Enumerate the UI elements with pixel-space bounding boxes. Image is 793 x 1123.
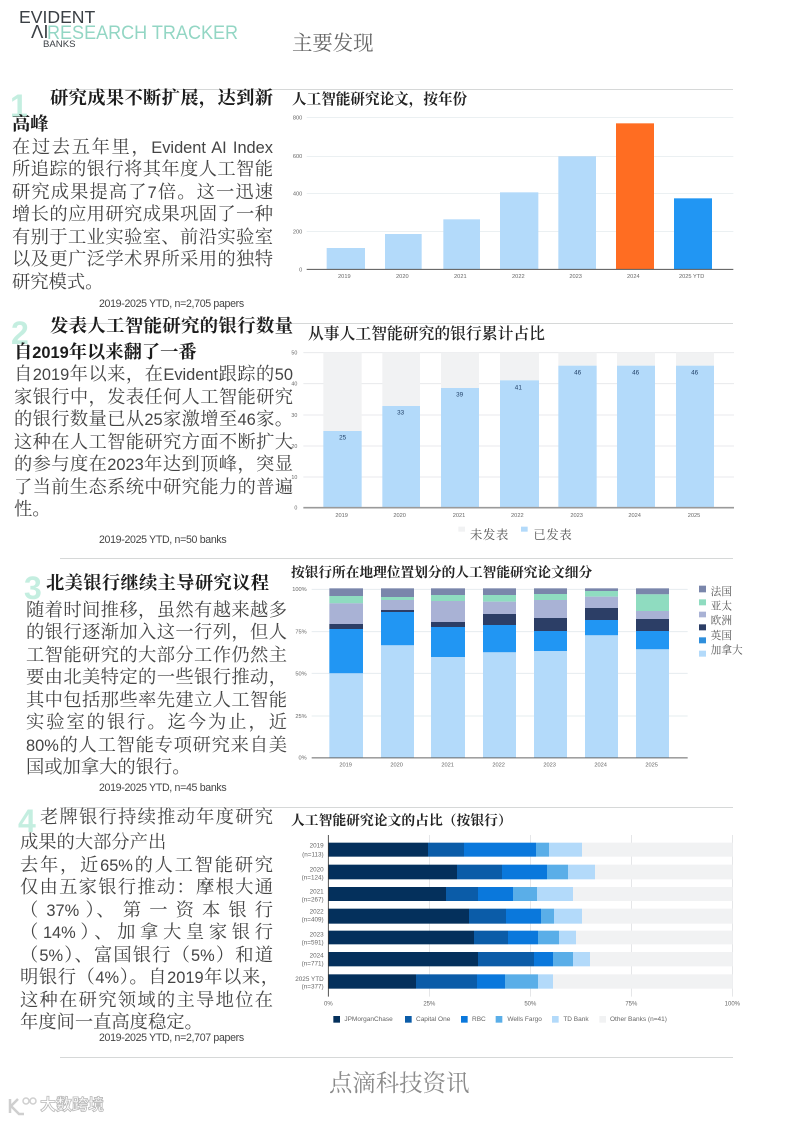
- stacked bar chart: cumulative share of banks: 0: [294, 506, 297, 512]
- stacked bar chart: papers by bank geography: 2021: [441, 763, 454, 769]
- legend: Europe: [699, 612, 732, 627]
- stacked bar chart: cumulative share of banks: 46: [691, 369, 699, 376]
- body text 2: 这种在人工智能研究方面不断扩大: [14, 432, 293, 452]
- bar chart: AI research papers by year: 2020: [396, 274, 409, 280]
- stacked bar chart: cumulative share of banks: 50: [291, 351, 297, 357]
- body text 3: 工智能研究的大部分工作仍然主: [26, 644, 287, 664]
- bar: 2024: [585, 588, 618, 758]
- heading 2: 自2019年以来翻了一番: [14, 342, 197, 362]
- stacked horizontal bar chart: share of papers by bank: (n=377): [302, 984, 324, 991]
- stacked bar chart: papers by bank geography: [292, 585, 743, 769]
- stacked horizontal bar chart: share of papers by bank: 2019: [310, 843, 324, 850]
- bar chart: AI research papers by year: [293, 116, 734, 280]
- legend: Wells Fargo: Wells Fargo: [507, 1016, 542, 1023]
- body text 2: 了当前生态系统中研究能力的普遍: [14, 476, 293, 496]
- stacked horizontal bar chart: share of papers by bank: 2023: [310, 932, 324, 939]
- body text 4: （ 37% ）、 第 一 资 本 银 行: [20, 900, 273, 920]
- body text 4: 年度间一直高度稳定。: [20, 1012, 203, 1032]
- body text 2: 自2019年以来，在Evident跟踪的50: [14, 364, 293, 384]
- logo wordmark: banks: BANKS: [43, 39, 76, 50]
- heading 3: 北美银行继续主导研究议程: [46, 573, 269, 593]
- legend: published: 已发表: [533, 527, 572, 542]
- stacked horizontal bar chart: share of papers by bank: 100%: [725, 1002, 740, 1008]
- bar: 2023: [534, 588, 567, 758]
- body text 2: 家银行中，发表任何人工智能研究: [14, 386, 293, 406]
- legend: JPMorgan Chase: JPMorganChase: [344, 1016, 393, 1023]
- stacked horizontal bar chart: share of papers by bank: (n=124): [302, 875, 324, 882]
- body text 3: 其中包括那些率先建立人工智能: [26, 690, 287, 710]
- body text 1: 有别于工业实验室、前沿实验室: [12, 226, 273, 246]
- chart title 4: 人工智能研究论文的占比（按银行）: [291, 813, 512, 828]
- heading 1: 研究成果不断扩展，达到新: [50, 88, 273, 108]
- stacked horizontal bar chart: share of papers by bank: 2022: [310, 909, 324, 916]
- stacked bar chart: cumulative share of banks: 20: [291, 444, 297, 450]
- legend: France: [699, 585, 732, 598]
- body text 2: [14, 364, 293, 519]
- legend: published: [521, 527, 572, 542]
- legend: RBC: [461, 1016, 486, 1023]
- stacked bar chart: cumulative share of banks: 2020: [393, 513, 406, 519]
- body text 1: [12, 136, 273, 292]
- stacked bar chart: cumulative share of banks: 10: [291, 475, 297, 481]
- heading 4: [20, 806, 273, 852]
- logo mark: AI: ΛI: [31, 21, 48, 42]
- stacked bar chart: cumulative share of banks: 40: [291, 382, 297, 388]
- row: 2022: [328, 909, 732, 924]
- stacked bar chart: cumulative share of banks: [291, 350, 734, 542]
- bar chart: AI research papers by year: 200: [293, 230, 302, 236]
- row: 2024: [328, 952, 732, 966]
- panel 1 text: research output: [12, 88, 273, 292]
- panel 2 text: banks publishing: [14, 316, 293, 519]
- legend: Canada: 加拿大: [711, 643, 743, 656]
- footer brand: 点滴科技资讯: [329, 1071, 469, 1097]
- heading 4: 成果的大部分产出: [20, 832, 166, 852]
- legend: Europe: 欧洲: [711, 614, 732, 627]
- stacked bar chart: cumulative share of banks: 2022: [511, 513, 524, 519]
- section 2 number: 2: [11, 315, 29, 351]
- page title: 主要发现: [292, 33, 374, 55]
- heading 1: [12, 88, 273, 134]
- stacked horizontal bar chart: share of papers by bank: 25%: [423, 1002, 436, 1008]
- highlighted bar: 2024: [616, 123, 654, 269]
- body text 1: 所追踪的银行将其年度人工智能: [12, 159, 273, 179]
- stacked horizontal bar chart: share of papers by bank: 2025 YTD: [295, 976, 324, 983]
- stacked bar chart: cumulative share of banks: 2021: [453, 513, 465, 519]
- heading 4: 老牌银行持续推动年度研究: [40, 806, 273, 826]
- legend: APAC: [699, 599, 732, 613]
- body text 4: （14%）、加拿大皇家银行: [20, 922, 273, 942]
- stacked horizontal bar chart: share of papers by bank: 50%: [524, 1002, 537, 1008]
- row: 2023: [328, 931, 732, 944]
- stacked bar chart: papers by bank geography: 0%: [298, 756, 307, 762]
- stacked horizontal bar chart: share of papers by bank: 0%: [324, 1002, 333, 1008]
- body text 1: 在过去五年里，Evident AI Index: [12, 136, 273, 156]
- panel 4 text: incumbent banks: [20, 806, 279, 1032]
- stacked horizontal bar chart: share of papers by bank: (n=591): [302, 940, 324, 947]
- legend: France: 法国: [711, 585, 732, 598]
- body text 3: 实验室的银行。迄今为止，近: [26, 712, 287, 732]
- heading 1: 高峰: [12, 114, 49, 134]
- chart title 2: 从事人工智能研究的银行累计占比: [308, 326, 545, 343]
- body text 1: 研究成果提高了7倍。这一迅速: [12, 182, 273, 202]
- logo wordmark: research tracker: RESEARCH TRACKER: [47, 22, 238, 44]
- body text 2: 的银行数量已从25家激增至46家。: [14, 409, 293, 429]
- stacked bar chart: cumulative share of banks: 46: [632, 369, 640, 376]
- stacked bar chart: papers by bank geography: 25%: [295, 714, 307, 720]
- stacked bar chart: cumulative share of banks: 2019: [335, 513, 348, 519]
- bar chart: AI research papers by year: 0: [299, 268, 302, 274]
- stacked bar chart: cumulative share of banks: 2024: [628, 513, 641, 519]
- stacked bar chart: papers by bank geography: 100%: [292, 587, 307, 593]
- legend: RBC: RBC: [472, 1016, 486, 1023]
- body text 4: 明银行（4%）。自2019年以来，: [20, 967, 279, 987]
- row: 2021: [328, 887, 732, 901]
- bar chart: AI research papers by year: 2019: [338, 274, 351, 280]
- source note 2: 2019-2025 YTD, n=50 banks: [99, 534, 226, 546]
- stacked bar chart: cumulative share of banks: 46: [574, 369, 582, 376]
- chart title 1: 人工智能研究论文，按年份: [292, 92, 467, 108]
- body text 3: 随着时间推移，虽然有越来越多: [26, 600, 287, 620]
- body text 3: 国或加拿大的银行。: [26, 757, 191, 777]
- legend: USA: [699, 637, 706, 643]
- bar: 2021: [431, 588, 465, 758]
- stacked horizontal bar chart: share of papers by bank: [295, 835, 740, 1023]
- legend: Capital One: Capital One: [416, 1016, 451, 1023]
- bar chart: AI research papers by year: 2024: [627, 274, 640, 280]
- icon: watermark logo: [8, 1097, 37, 1116]
- stacked bar chart: cumulative share of banks: 41: [515, 385, 522, 392]
- stacked bar chart: papers by bank geography: 2019: [339, 763, 352, 769]
- legend: not published: 未发表: [470, 527, 508, 542]
- stacked bar chart: papers by bank geography: 2023: [543, 763, 556, 769]
- body text 1: 增长的应用研究成果巩固了一种: [12, 204, 273, 224]
- body text 4: 去年，近65%的人工智能研究: [20, 854, 273, 874]
- bar: 2019: [329, 588, 363, 758]
- legend: APAC: 亚太: [711, 600, 732, 613]
- bar chart: AI research papers by year: 400: [293, 192, 302, 198]
- bar chart: AI research papers by year: 2021: [454, 274, 467, 280]
- source note 4: 2019-2025 YTD, n=2,707 papers: [99, 1032, 244, 1044]
- bar chart: AI research papers by year: 2025 YTD: [679, 274, 704, 280]
- stacked bar chart: cumulative share of banks: 2025: [688, 513, 700, 519]
- stacked bar chart: cumulative share of banks: 33: [397, 409, 405, 416]
- body text 4: 仅由五家银行推动：摩根大通: [20, 877, 273, 897]
- panel 3 text: north american banks: [26, 573, 287, 777]
- watermark text: 大数跨境: [40, 1097, 104, 1114]
- stacked bar chart: papers by bank geography: 2020: [390, 763, 403, 769]
- legend: TD Bank: [552, 1016, 589, 1023]
- stacked bar chart: papers by bank geography: 2024: [594, 763, 607, 769]
- bar: 2025: [636, 588, 669, 758]
- bar chart: AI research papers by year: 800: [293, 116, 302, 122]
- body text 4: 这种在研究领域的主导地位在: [20, 990, 273, 1010]
- stacked horizontal bar chart: share of papers by bank: 2024: [310, 953, 324, 960]
- stacked bar chart: papers by bank geography: 75%: [295, 630, 307, 636]
- row: 2020: [328, 865, 732, 879]
- stacked horizontal bar chart: share of papers by bank: (n=113): [302, 852, 324, 859]
- section 4 number: 4: [18, 803, 36, 839]
- stacked horizontal bar chart: share of papers by bank: 75%: [625, 1002, 638, 1008]
- legend: Canada: [699, 643, 743, 657]
- body text 2: 性。: [14, 499, 51, 519]
- stacked horizontal bar chart: share of papers by bank: (n=409): [302, 917, 324, 924]
- body text 1: 研究模式。: [12, 272, 103, 292]
- stacked bar chart: papers by bank geography: 50%: [295, 672, 307, 678]
- body text 3: 要由北美特定的一些银行推动，: [26, 667, 287, 687]
- chart title 3: 按银行所在地理位置划分的人工智能研究论文细分: [291, 565, 592, 580]
- logo wordmark: EVIDENT: EVIDENT: [19, 7, 95, 27]
- bar: 2022: [483, 588, 516, 758]
- stacked horizontal bar chart: share of papers by bank: 2020: [310, 867, 324, 874]
- body text 4: （5%）、富国银行（5%）和道: [20, 944, 273, 964]
- heading 2: 发表人工智能研究的银行数量: [50, 316, 293, 336]
- stacked horizontal bar chart: share of papers by bank: (n=267): [302, 897, 324, 904]
- bar chart: AI research papers by year: 2023: [569, 274, 582, 280]
- stacked bar chart: cumulative share of banks: 30: [291, 413, 297, 419]
- body text 2: 的参与度在2023年达到顶峰，突显: [14, 454, 293, 474]
- body text 3: 80%的人工智能专项研究来自美: [26, 734, 287, 754]
- stacked horizontal bar chart: share of papers by bank: 2021: [310, 889, 324, 896]
- legend: TD Bank: TD Bank: [563, 1016, 589, 1023]
- legend: other banks: Other Banks (n=41): [610, 1016, 667, 1023]
- body text 3: [26, 600, 287, 777]
- logo: Evident AI Research Tracker Banks: [19, 7, 238, 50]
- legend: UK: [699, 624, 732, 642]
- source note 3: 2019-2025 YTD, n=45 banks: [99, 782, 226, 794]
- bar: 2020: [381, 588, 414, 758]
- watermark: [8, 1096, 104, 1116]
- legend: UK: 英国: [711, 629, 732, 642]
- heading 2: [14, 316, 293, 362]
- source note 1: 2019-2025 YTD, n=2,705 papers: [99, 298, 244, 310]
- stacked bar chart: papers by bank geography: 2025: [645, 763, 658, 769]
- stacked bar chart: papers by bank geography: 2022: [492, 763, 505, 769]
- bar: 2025 YTD: [674, 198, 712, 269]
- stacked horizontal bar chart: share of papers by bank: (n=771): [302, 961, 324, 968]
- stacked bar chart: cumulative share of banks: 2023: [570, 513, 583, 519]
- row: 2019: [328, 843, 732, 857]
- body text 4: [20, 854, 279, 1032]
- section 3 number: 3: [24, 570, 42, 606]
- body text 3: 的银行逐渐加入这一行列，但人: [26, 622, 287, 642]
- bar chart: AI research papers by year: 2022: [512, 274, 525, 280]
- section 1 number: 1: [10, 88, 28, 124]
- row: 2025 YTD: [328, 974, 732, 989]
- bar chart: AI research papers by year: 600: [293, 154, 302, 160]
- body text 1: 以及更广泛学术界所采用的独特: [12, 249, 273, 269]
- stacked bar chart: cumulative share of banks: 25: [339, 434, 347, 441]
- stacked bar chart: cumulative share of banks: 39: [456, 391, 464, 398]
